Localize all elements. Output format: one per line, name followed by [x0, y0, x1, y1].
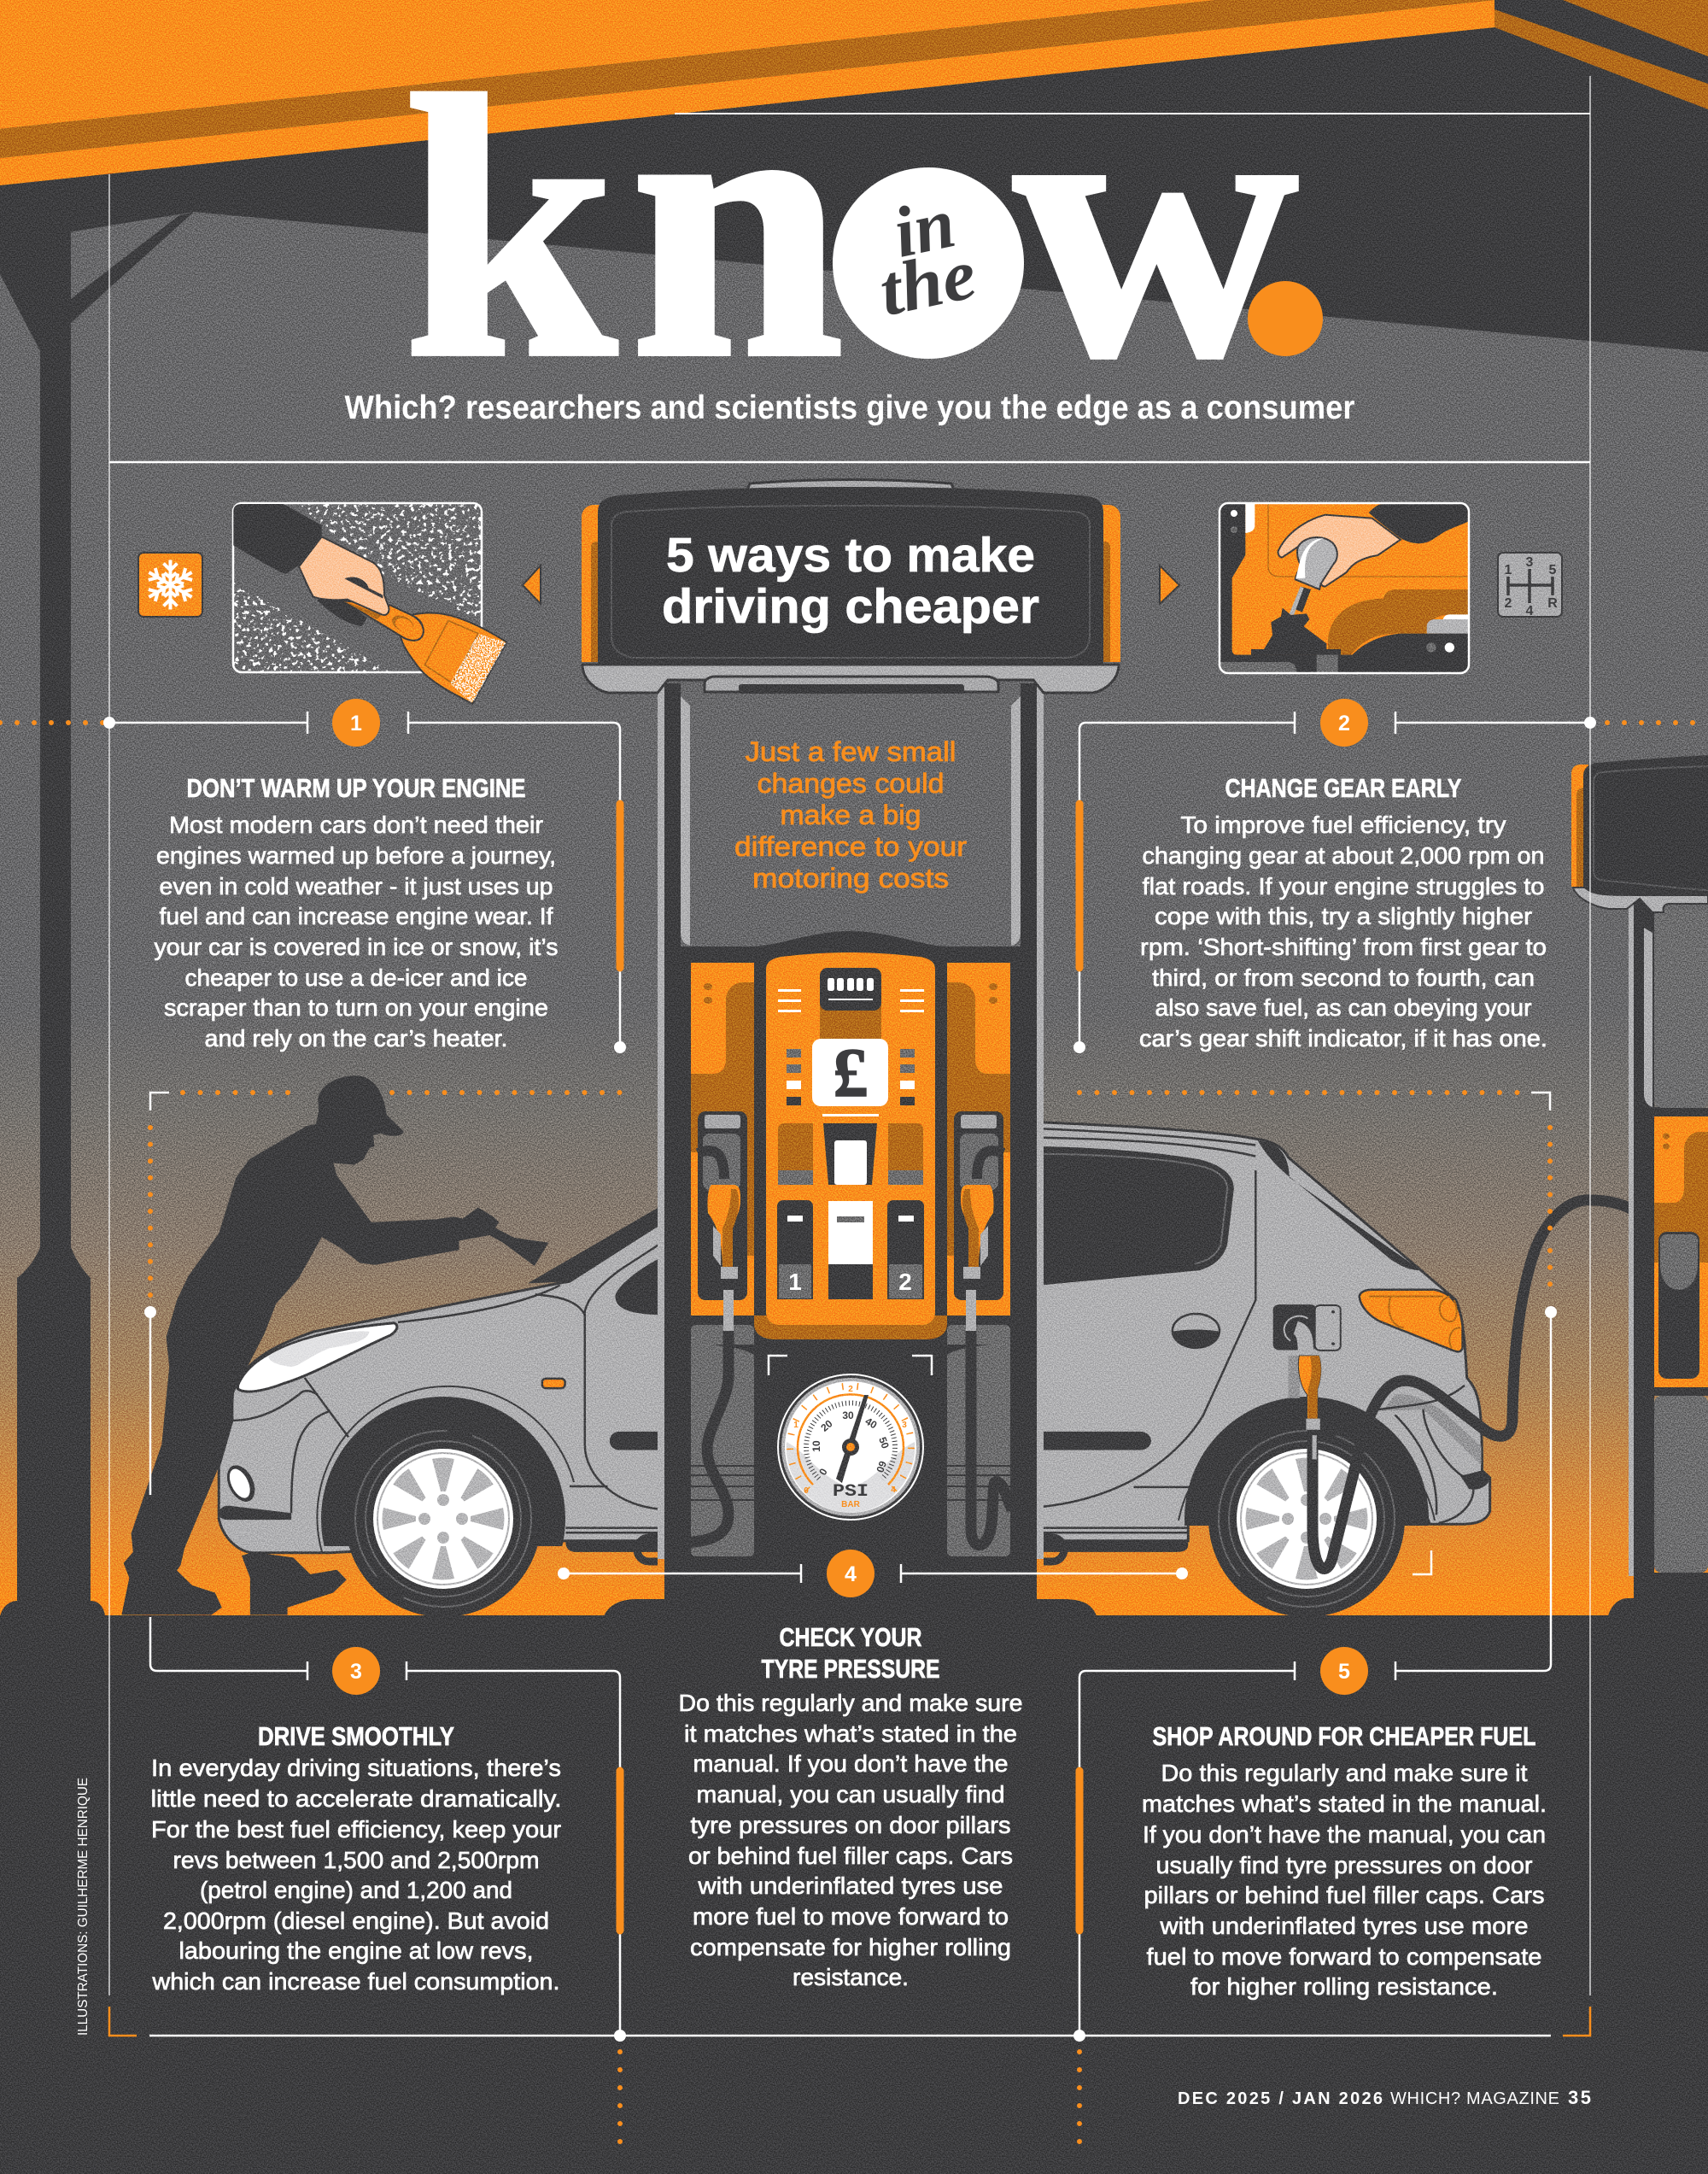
gear pattern numbers: 2: [1505, 596, 1512, 611]
gauge labels: 40: [863, 1415, 880, 1432]
right pump sign: [1571, 755, 1708, 912]
grey wall gradient: [0, 212, 1708, 1616]
step 2: To improve fuel efficiency, try: [1180, 812, 1506, 838]
orange intro text: [734, 736, 967, 894]
step 5: SHOP AROUND FOR CHEAPER FUEL: [1153, 1721, 1535, 1751]
title: in the know: [403, 11, 1323, 437]
gear pattern numbers: 4: [1526, 604, 1534, 618]
step 3: 3: [350, 1660, 362, 1684]
car: [219, 1122, 1631, 1641]
step 4: more fuel to move forward to: [693, 1903, 1009, 1930]
illustration: scraping ice: [226, 495, 506, 704]
left nozzle holster: [698, 1111, 747, 1331]
fuel grade panels: [777, 1123, 924, 1299]
gauge labels: BAR: [841, 1500, 861, 1509]
gauge labels: 0: [816, 1466, 830, 1477]
sign inner panel: [611, 506, 1090, 658]
subtitle: Which? researchers and scientists give you the edge as a consumer: [345, 390, 1354, 426]
step 5: matches what’s stated in the manual.: [1142, 1790, 1547, 1817]
central body shadow: [754, 1316, 947, 1339]
step 5: [1142, 1647, 1547, 2000]
price sign head: [582, 480, 1120, 694]
gear pattern numbers: 5: [1549, 563, 1557, 577]
step 1: even in cold weather - it just uses up: [159, 873, 553, 899]
step 4: TYRE PRESSURE: [762, 1654, 939, 1684]
sign lower bar: [582, 665, 1119, 693]
orange intro text: motoring costs: [752, 863, 949, 894]
sign headline: 5 ways to make: [666, 528, 1035, 583]
step 1: engines warmed up before a journey,: [156, 842, 556, 869]
step 5: If you don’t have the manual, you can: [1143, 1821, 1546, 1848]
step 4: [678, 1550, 1023, 1990]
step 4: CHECK YOUR: [779, 1622, 922, 1652]
sign headline: driving cheaper: [662, 579, 1039, 634]
sign headline: [662, 528, 1039, 634]
pound sign: £: [834, 1034, 868, 1111]
door handle: [1173, 1314, 1220, 1348]
side panel left: [691, 963, 754, 1316]
refuelling hose: [1313, 1200, 1631, 1569]
fuel filler cap: [1273, 1304, 1341, 1351]
pump pillars: [658, 683, 1044, 1602]
gear pattern numbers: R: [1547, 596, 1558, 611]
step 5: for higher rolling resistance.: [1190, 1973, 1498, 2000]
indicator bars: [787, 1049, 915, 1105]
step 3: labouring the engine at low revs,: [179, 1937, 533, 1964]
illustration: gear stick: [1220, 503, 1469, 673]
fog light: [221, 1461, 260, 1506]
headlight: [238, 1323, 397, 1392]
step 1: scraper than to turn on your engine: [164, 994, 548, 1021]
gear pattern numbers: [1505, 555, 1558, 618]
gear pattern numbers: 3: [1526, 555, 1534, 570]
step 2: cope with this, try a slightly higher: [1155, 903, 1532, 929]
gauge labels: 1: [793, 1421, 798, 1430]
step 3: which can increase fuel consumption.: [151, 1968, 559, 1995]
step 2: also save fuel, as can obeying your: [1155, 994, 1532, 1021]
side marker: [542, 1379, 565, 1388]
digital display: [820, 968, 881, 1039]
footer: [1178, 2087, 1591, 2108]
gauge bracket marks: [769, 1356, 932, 1375]
step 2: rpm. ‘Short-shifting’ from first gear to: [1140, 934, 1547, 960]
pump numbers: 2: [898, 1269, 912, 1295]
gauge labels: 30: [842, 1409, 854, 1421]
step 5: usually find tyre pressures on door: [1156, 1852, 1532, 1878]
step 3: 2,000rpm (diesel engine). But avoid: [163, 1907, 549, 1934]
title: in the know: in: [886, 183, 962, 273]
man silhouette with scraper: [121, 1075, 548, 1615]
icon: snowflake: [138, 553, 202, 617]
pound sign panel: [812, 1039, 888, 1106]
step 4: with underinflated tyres use: [697, 1872, 1003, 1899]
orange intro text: changes could: [757, 768, 945, 799]
footer: 35: [1568, 2087, 1591, 2108]
ground band: [0, 1615, 1708, 2174]
title: in the know: k: [403, 21, 619, 436]
step 3: little need to accelerate dramatically.: [150, 1785, 562, 1812]
step 1: fuel and can increase engine wear. If: [159, 903, 553, 929]
step 4: compensate for higher rolling: [690, 1934, 1011, 1960]
step 1: and rely on the car’s heater.: [205, 1025, 507, 1052]
gauge labels: [793, 1385, 907, 1509]
step 4: Do this regularly and make sure: [678, 1690, 1023, 1716]
step 2: changing gear at about 2,000 rpm on: [1143, 842, 1544, 869]
step 2: flat roads. If your engine struggles to: [1143, 873, 1544, 899]
step 4: 4: [845, 1562, 857, 1586]
car body rear: [1021, 1122, 1490, 1552]
step 2: 2: [1338, 712, 1350, 735]
title: in the know: o: [834, 12, 1026, 437]
side panel right: [947, 963, 1010, 1316]
canopy post: [0, 212, 194, 1616]
step 4: manual, you can usually find: [697, 1781, 1004, 1808]
gauge labels: 2: [848, 1385, 853, 1394]
step 2: [1139, 699, 1547, 1052]
step 3: revs between 1,500 and 2,500rpm: [173, 1847, 540, 1873]
right-hand pump in background: [1571, 755, 1708, 1616]
step 5: 5: [1338, 1660, 1350, 1684]
step 2: CHANGE GEAR EARLY: [1225, 773, 1462, 803]
pedestal rings: [637, 1538, 1064, 1562]
step 1: DON’T WARM UP YOUR ENGINE: [186, 773, 526, 803]
gauge labels: 50: [876, 1435, 892, 1450]
step 4: it matches what’s stated in the: [684, 1720, 1017, 1747]
central fuel pump: [604, 683, 1097, 1616]
step 4: manual. If you don’t have the: [693, 1750, 1008, 1777]
sign orange sides: [582, 505, 1120, 662]
step 2: car’s gear shift indicator, if it has one.: [1139, 1025, 1547, 1052]
car body front: [219, 1204, 665, 1553]
step 3: DRIVE SMOOTHLY: [258, 1721, 454, 1751]
wheel arches: [321, 1397, 565, 1546]
gauge labels: 60: [874, 1459, 889, 1474]
gauge labels: 10: [810, 1440, 822, 1452]
step 1: 1: [350, 712, 362, 735]
step 5: pillars or behind fuel filler caps. Cars: [1144, 1882, 1544, 1908]
rear wheel: [1208, 1421, 1405, 1617]
lower grey panels: [691, 1325, 754, 1556]
step 5: with underinflated tyres use more: [1159, 1913, 1529, 1939]
footer: WHICH? MAGAZINE: [1390, 2089, 1559, 2108]
canopy roof: [0, 0, 1708, 185]
right pump hose: [971, 1331, 1012, 1545]
gauge labels: 0: [804, 1486, 809, 1496]
icon: gear pattern plate: [1498, 553, 1562, 617]
gauge labels: 20: [818, 1417, 835, 1434]
pump numbers: 1: [788, 1269, 802, 1295]
step 5: fuel to move forward to compensate: [1146, 1943, 1542, 1970]
step 1: [154, 699, 559, 1052]
step 4: resistance.: [793, 1964, 909, 1990]
step 3: [150, 1647, 562, 1995]
right nozzle holster: [954, 1111, 1003, 1331]
pressure gauge: [778, 1374, 923, 1520]
title: in the know: the: [873, 234, 983, 331]
title: in the know: n: [630, 12, 844, 437]
sign body: [598, 487, 1103, 675]
left pump hose: [675, 1331, 728, 1543]
sign top cap: [745, 480, 956, 495]
pump base: [604, 1599, 1097, 1616]
central body: [766, 952, 935, 1325]
gauge labels: PSI: [833, 1482, 869, 1502]
front wheel: [345, 1421, 541, 1617]
orange intro text: Just a few small: [745, 736, 956, 767]
pump numbers: [788, 1269, 912, 1295]
step 4: tyre pressures on door pillars: [690, 1812, 1011, 1838]
footer: DEC 2025 / JAN 2026: [1178, 2089, 1383, 2108]
step 1: Most modern cars don’t need their: [169, 812, 543, 838]
step 3: In everyday driving situations, there’s: [151, 1755, 561, 1781]
step 5: Do this regularly and make sure it: [1161, 1760, 1528, 1786]
refuelling nozzle: [1289, 1327, 1321, 1459]
rear bumper details: [1369, 1386, 1490, 1523]
gauge labels: 3: [902, 1421, 907, 1430]
arrow right: [1160, 565, 1179, 604]
orange intro text: difference to your: [734, 831, 967, 862]
gauge labels: 4: [891, 1485, 896, 1495]
step 1: your car is covered in ice or snow, it’s: [154, 934, 559, 960]
illustrator credit: ILLUSTRATIONS: GUILHERME HENRIQUE: [76, 1778, 91, 2036]
step 2: third, or from second to fourth, can: [1152, 964, 1535, 991]
orange intro text: make a big: [781, 800, 921, 830]
tail light: [1360, 1290, 1463, 1351]
step 4: or behind fuel filler caps. Cars: [688, 1843, 1013, 1869]
step 1: cheaper to use a de-icer and ice: [184, 964, 528, 991]
step 3: For the best fuel efficiency, keep your: [151, 1816, 561, 1843]
gear pattern numbers: 1: [1505, 563, 1512, 577]
step 3: (petrol engine) and 1,200 and: [200, 1877, 512, 1903]
title: in the know: w: [1013, 11, 1299, 437]
arrow left: [523, 565, 541, 604]
